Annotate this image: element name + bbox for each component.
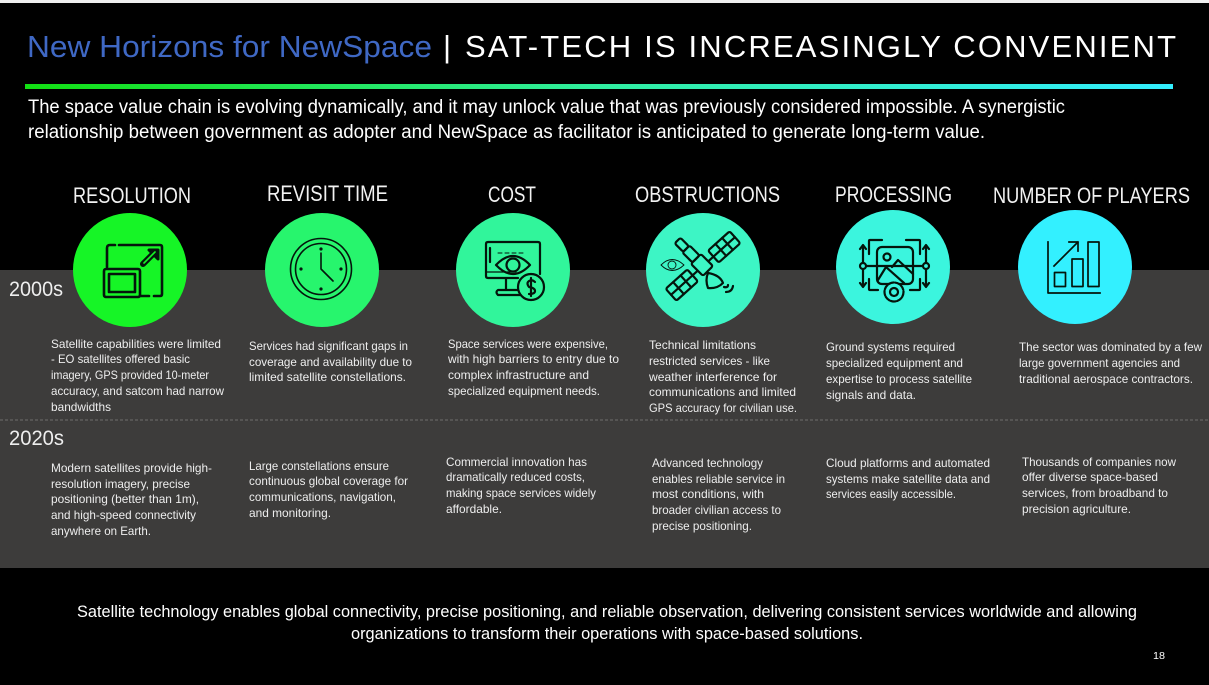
text: revisit 2020s: communications, navigation,: [249, 491, 396, 504]
text: obstructions 2000s: weather interference for: [648, 371, 777, 384]
text: players 2000s: [1019, 341, 1203, 386]
column headings: COST: [488, 182, 536, 207]
closing statement: organizations to transform their operations with space-based solutions.: [351, 625, 863, 643]
text: obstructions 2000s: restricted services - like: [649, 355, 770, 368]
text: processing 2000s: Ground systems required: [826, 341, 955, 354]
text: cost 2000s: specialized equipment needs.: [448, 385, 600, 398]
text: cost 2000s: Space services were expensive,: [448, 338, 608, 351]
text: cost 2020s: Commercial innovation has: [446, 456, 587, 469]
column headings: [73, 181, 1190, 208]
text: processing 2000s: [826, 341, 972, 402]
text: resolution 2000s: bandwidths: [51, 401, 111, 414]
text: resolution 2000s: imagery, GPS provided 10-meter: [51, 369, 209, 382]
intro text: relationship between government as adopter and NewSpace as facilitator is anticipated to generate long-term value.: [28, 122, 985, 143]
title: SAT-TECH IS INCREASINGLY CONVENIENT: [465, 29, 1176, 64]
text: players 2000s: traditional aerospace contractors.: [1019, 373, 1193, 386]
text: cost 2020s: affordable.: [446, 503, 502, 516]
text: players 2000s: large government agencies and: [1019, 357, 1180, 370]
icon: resolution: [73, 213, 187, 327]
icon: cost monitor: [456, 213, 570, 327]
text: obstructions 2000s: communications and limited: [649, 386, 796, 399]
text: resolution 2000s: [51, 338, 225, 414]
text: revisit 2000s: limited satellite constellations.: [249, 371, 406, 384]
text: players 2000s: The sector was dominated by a few: [1019, 341, 1203, 354]
label: 2020s: 2020s: [9, 427, 64, 450]
title: [27, 29, 1176, 64]
text: revisit 2000s: coverage and availability due to: [249, 356, 412, 369]
icon: number of players chart: [1018, 210, 1132, 324]
icon: revisit time clock: [265, 213, 379, 327]
closing statement: Satellite technology enables global connectivity, precise positioning, and reliable observation, delivering consistent services worldwide and allowing: [77, 603, 1137, 621]
icon: processing: [836, 210, 950, 324]
text: obstructions 2020s: broader civilian access to: [652, 504, 781, 517]
text: processing 2000s: expertise to process satellite: [826, 373, 972, 386]
column headings: REVISIT TIME: [267, 181, 388, 206]
text: cost 2000s: [447, 338, 619, 398]
text: processing 2000s: signals and data.: [826, 389, 916, 402]
text: resolution 2020s: resolution imagery, precise: [51, 478, 190, 491]
text: cost 2000s: complex infrastructure and: [448, 369, 589, 382]
text: revisit 2020s: Large constellations ensure: [249, 460, 389, 473]
text: resolution 2020s: anywhere on Earth.: [51, 525, 151, 538]
panel: timeline band: [0, 270, 1209, 568]
text: revisit 2000s: [249, 340, 412, 384]
text: revisit 2020s: continuous global coverage for: [249, 475, 408, 488]
text: resolution 2000s: accuracy, and satcom had narrow: [51, 385, 225, 398]
text: processing 2000s: specialized equipment and: [826, 357, 963, 370]
title: New Horizons for NewSpace: [27, 29, 432, 64]
page number: 18: [1153, 651, 1165, 662]
column headings: PROCESSING: [835, 182, 952, 207]
text: resolution 2020s: and high-speed connectivity: [51, 509, 196, 522]
text: resolution 2020s: positioning (better than 1m),: [51, 493, 199, 506]
text: obstructions 2020s: most conditions, with: [652, 488, 764, 501]
text: processing 2020s: services easily accessible.: [826, 488, 956, 501]
text: processing 2020s: Cloud platforms and automated: [826, 457, 990, 470]
text: resolution 2020s: Modern satellites provide high-: [51, 462, 212, 475]
text: players 2020s: services, from broadband to: [1022, 487, 1168, 500]
text: obstructions 2020s: [652, 457, 785, 533]
text: obstructions 2000s: Technical limitations: [649, 339, 756, 352]
intro text: The space value chain is evolving dynamically, and it may unlock value that was previously considered impossible. A synergistic: [28, 97, 1065, 118]
text: players 2020s: offer diverse space-based: [1022, 471, 1158, 484]
label: 2000s: 2000s: [9, 278, 63, 301]
text: resolution 2000s: Satellite capabilities were limited: [51, 338, 221, 351]
text: processing 2020s: [826, 457, 990, 501]
icon: obstructions satellite: [646, 213, 760, 327]
text: resolution 2020s: [51, 462, 212, 538]
text: obstructions 2000s: GPS accuracy for civilian use.: [649, 402, 797, 415]
text: cost 2000s: with high barriers to entry due to: [447, 353, 619, 366]
text: obstructions 2000s: [648, 339, 797, 415]
text: revisit 2020s: and monitoring.: [249, 507, 331, 520]
text: cost 2020s: dramatically reduced costs,: [446, 471, 585, 484]
gradient divider: [25, 84, 1173, 89]
text: resolution 2000s: - EO satellites offered basic: [51, 353, 190, 366]
text: revisit 2020s: [249, 460, 408, 520]
text: obstructions 2020s: Advanced technology: [652, 457, 763, 470]
text: obstructions 2020s: precise positioning.: [652, 520, 752, 533]
text: cost 2020s: making space services widely: [446, 487, 596, 500]
text: cost 2020s: [446, 456, 596, 516]
text: players 2020s: [1022, 456, 1177, 516]
text: processing 2020s: systems make satellite data and: [826, 473, 990, 486]
closing statement: [77, 603, 1137, 643]
intro text: [28, 97, 1065, 143]
column headings: OBSTRUCTIONS: [635, 182, 780, 207]
text: players 2020s: precision agriculture.: [1022, 503, 1131, 516]
text: revisit 2000s: Services had significant gaps in: [249, 340, 408, 353]
text: players 2020s: Thousands of companies now: [1022, 456, 1177, 469]
text: obstructions 2020s: enables reliable service in: [652, 473, 785, 486]
column headings: RESOLUTION: [73, 183, 191, 208]
title: |: [443, 29, 451, 64]
